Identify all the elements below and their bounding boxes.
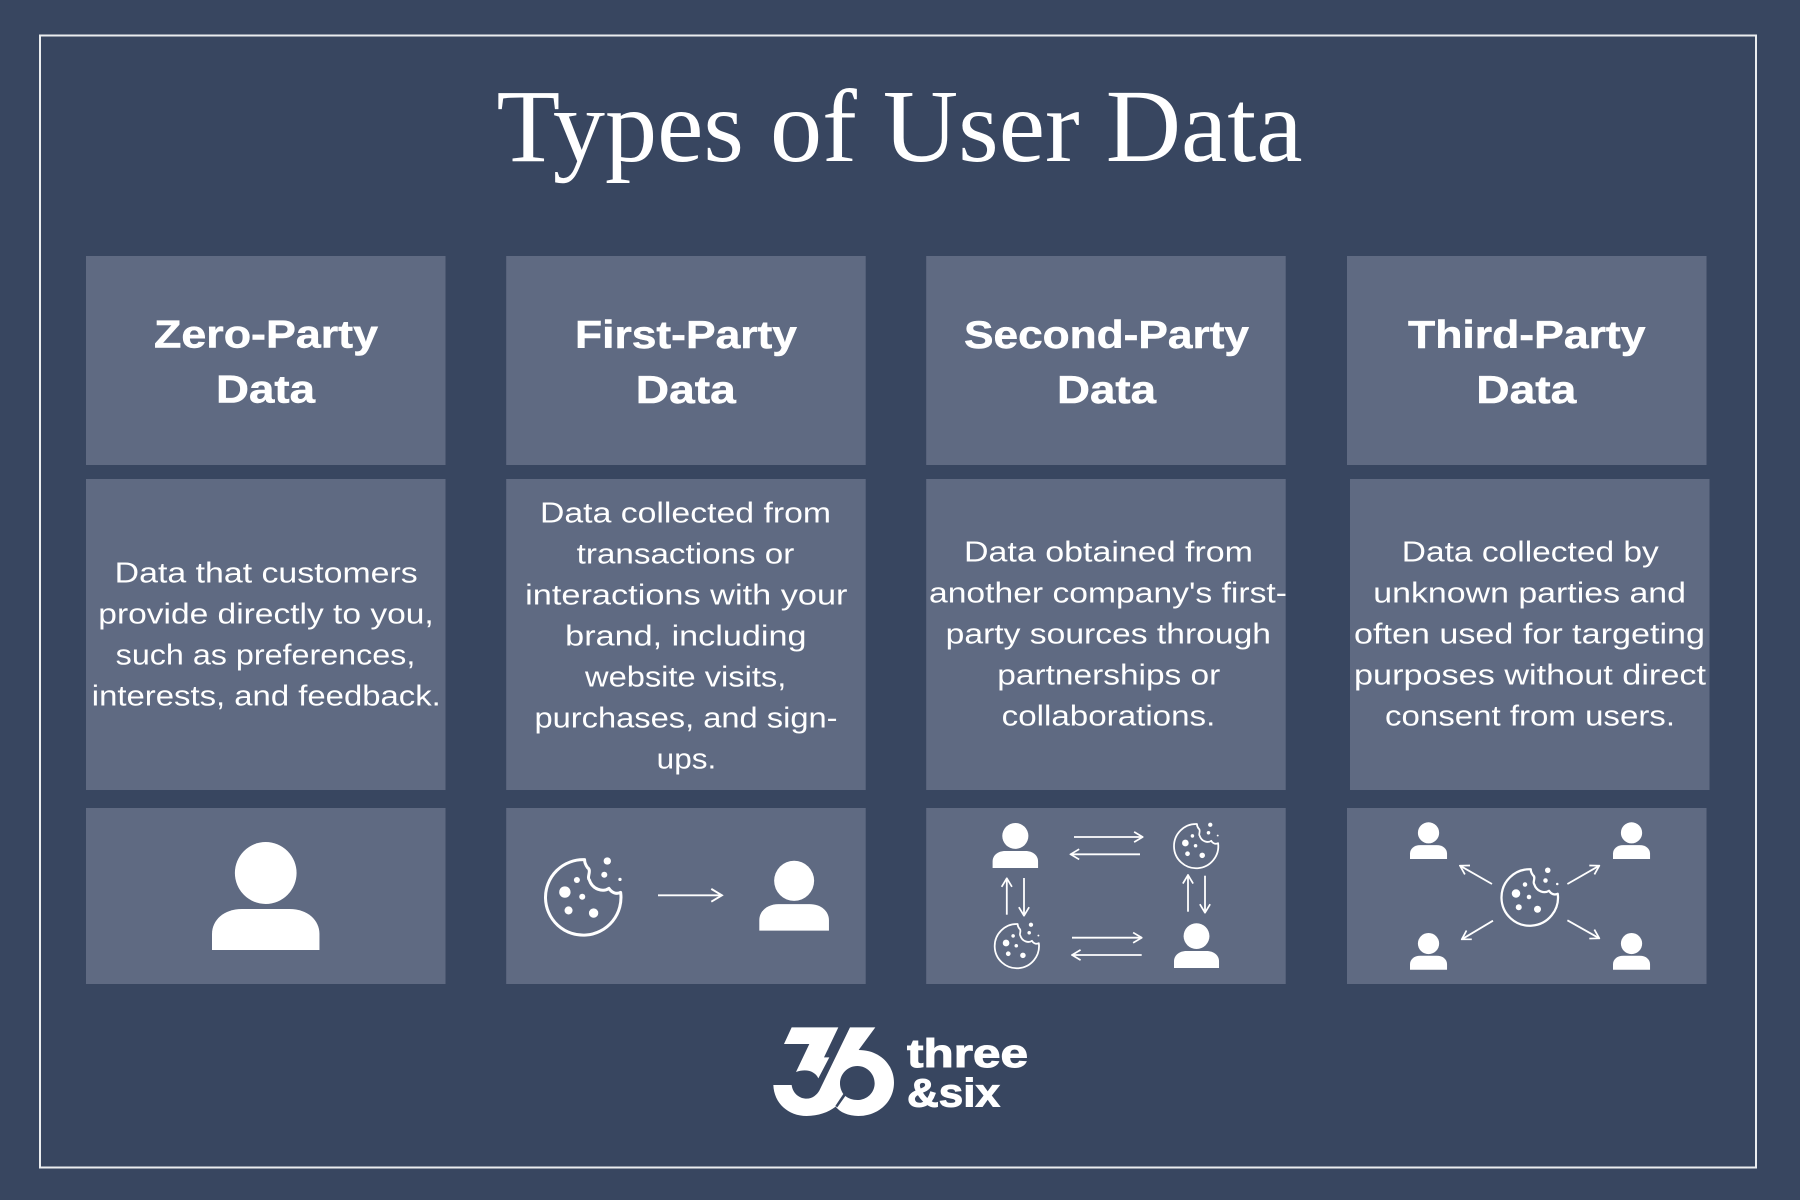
logo wordmark: &six: [907, 1072, 1000, 1116]
heading: third-party data: Data: [1476, 369, 1577, 412]
description: second-party data: Data obtained from: [964, 537, 1253, 569]
heading: first-party data: [506, 256, 866, 465]
description: first-party data: brand, including: [565, 620, 806, 652]
logo wordmark: three: [907, 1032, 1028, 1076]
description: second-party data: another company's first-: [929, 578, 1287, 610]
icon panel: single user: [86, 808, 446, 984]
description: first-party data: purchases, and sign-: [534, 702, 838, 734]
icon panel: partner data exchange: [926, 808, 1286, 984]
arrows: exchange: [1007, 837, 1205, 955]
icon: cookie: [545, 857, 622, 935]
title: Types of User Data: [496, 69, 1302, 184]
description: zero-party data: [86, 479, 446, 790]
description: first-party data: transactions or: [577, 538, 795, 570]
description: first-party data: interactions with your: [525, 579, 848, 611]
heading: zero-party data: Zero-Party: [154, 314, 378, 357]
icon: cookie top right: [1174, 823, 1219, 868]
description: first-party data: [506, 479, 866, 790]
description: second-party data: party sources through: [946, 619, 1271, 651]
description: third-party data: Data collected by: [1402, 537, 1659, 569]
description: zero-party data: Data that customers: [115, 557, 418, 589]
heading: second-party data: Data: [1057, 369, 1156, 412]
description: first-party data: ups.: [657, 743, 716, 775]
description: zero-party data: such as preferences,: [116, 639, 415, 671]
icon: user top left: [993, 823, 1038, 868]
panel: second-party column: [926, 256, 1287, 984]
description: first-party data: website visits,: [584, 661, 786, 693]
icon: user bottom right: [1174, 923, 1219, 968]
panel: first-party column: [506, 256, 866, 984]
description: second-party data: [926, 479, 1287, 790]
description: second-party data: collaborations.: [1002, 701, 1215, 733]
panel: third-party column: [1347, 256, 1710, 984]
description: zero-party data: interests, and feedback.: [92, 680, 441, 712]
icon: user bottom left: [1410, 933, 1447, 970]
description: third-party data: purposes without direct: [1354, 660, 1706, 692]
arrow: cookie to user: [658, 894, 722, 896]
heading: zero-party data: Data: [216, 369, 315, 412]
icon panel: cookie to user: [506, 808, 866, 984]
heading: second-party data: Second-Party: [964, 314, 1249, 357]
heading: third-party data: [1347, 256, 1706, 465]
logo mark: [773, 1027, 894, 1116]
description: third-party data: often used for targeting: [1354, 619, 1705, 651]
heading: third-party data: Third-Party: [1408, 314, 1646, 357]
icon: user top left: [1410, 822, 1447, 859]
icon: cookie center: [1501, 868, 1558, 926]
heading: first-party data: First-Party: [575, 314, 797, 357]
description: third-party data: unknown parties and: [1373, 578, 1686, 610]
description: first-party data: Data collected from: [540, 497, 831, 529]
description: third-party data: [1350, 479, 1710, 790]
description: third-party data: consent from users.: [1385, 701, 1675, 733]
heading: first-party data: Data: [636, 369, 736, 412]
icon panel: cookie to many users: [1347, 808, 1706, 984]
icon: user top right: [1613, 822, 1650, 859]
logo: three and six: [773, 1027, 1028, 1116]
heading: zero-party data: [86, 256, 446, 465]
icon: user bottom right: [1613, 933, 1650, 970]
logo wordmark: [907, 1032, 1028, 1116]
icon: cookie bottom left: [995, 923, 1039, 968]
icon: user: [759, 861, 829, 931]
panel: zero-party column: [86, 256, 446, 984]
description: zero-party data: provide directly to you,: [98, 598, 434, 630]
description: second-party data: partnerships or: [997, 660, 1221, 692]
heading: second-party data: [926, 256, 1286, 465]
arrows: outward: [1460, 866, 1599, 939]
